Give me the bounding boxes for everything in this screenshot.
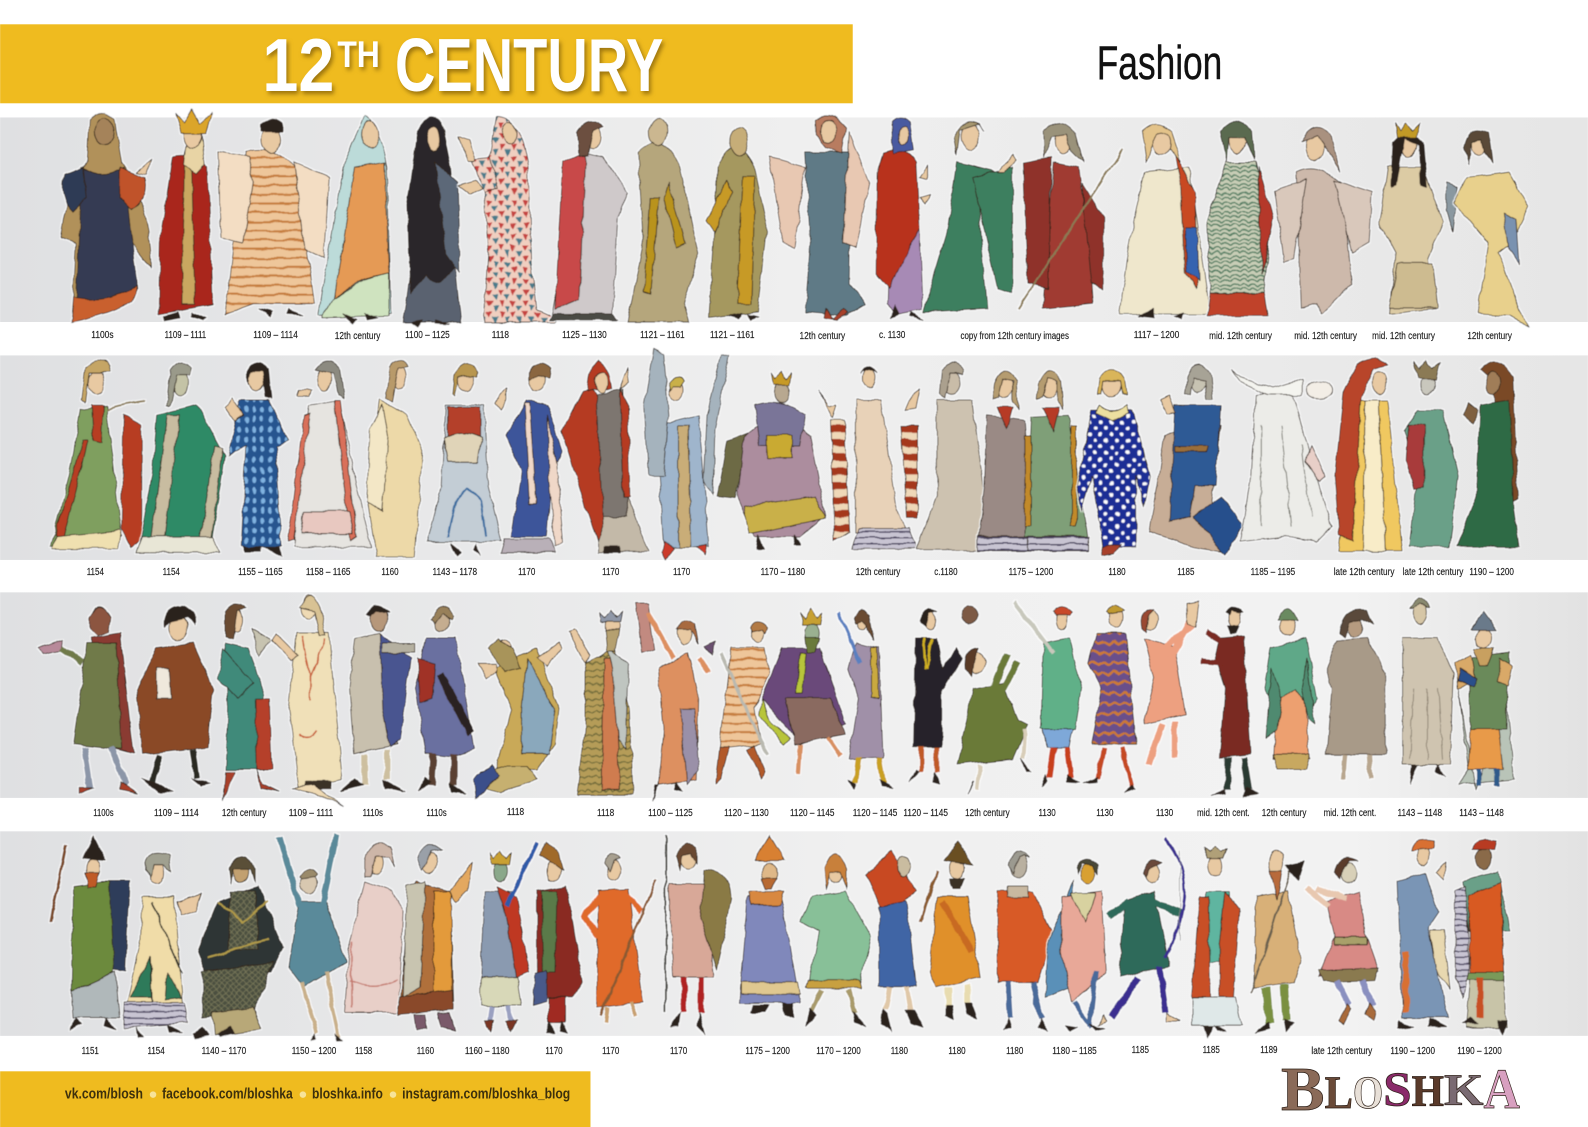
date labels: row 3: mid. 12th cent. bbox=[1197, 808, 1250, 819]
date labels: row 3: 1110s bbox=[426, 808, 447, 819]
date labels: row 3: 1130 bbox=[1096, 808, 1114, 819]
figure: man with sword and shield bbox=[51, 836, 130, 1030]
figure: woman in teal bbox=[218, 603, 280, 800]
date labels: row 3: 12th century bbox=[222, 808, 267, 819]
date labels: row 1: c. 1130 bbox=[879, 330, 906, 341]
figure: green-robed with grey hair bbox=[136, 362, 225, 553]
title banner bbox=[0, 23, 853, 107]
date labels: row 4: 1170 bbox=[670, 1046, 687, 1057]
figure: taupe woman bbox=[1274, 127, 1372, 314]
band: row 1 bbox=[0, 117, 1588, 322]
figure: woman in striped orange bbox=[218, 119, 329, 317]
date labels: row 1: 1109 – 1114 bbox=[253, 330, 298, 341]
date labels: row 3: 1143 – 1148 bbox=[1459, 808, 1504, 819]
figure: woman with blue-green cloak bbox=[1045, 859, 1106, 1031]
figure: kneeling king bbox=[474, 640, 561, 799]
figure: cream woman with green skirt bbox=[123, 852, 202, 1038]
date labels: row 2 bbox=[87, 567, 1514, 578]
figure: taupe man bbox=[1327, 610, 1385, 780]
date labels: row 2: 1170 bbox=[518, 567, 536, 578]
date labels: row 4: 1158 bbox=[355, 1046, 373, 1057]
date labels: row 3: 1130 bbox=[1039, 808, 1056, 819]
figure: man in striped tunic bbox=[1084, 605, 1136, 793]
figure: tan woman with hanging sleeves bbox=[818, 366, 920, 549]
figure: man in blue-lilac with orange hat bbox=[739, 835, 800, 1019]
date labels: row 2: 1185 bbox=[1177, 567, 1195, 578]
footer banner with links: facebook.com/bloshka bbox=[162, 1087, 293, 1103]
date labels: row 4: 1160 bbox=[417, 1046, 434, 1057]
date labels: row 1: copy from 12th century images bbox=[961, 331, 1069, 342]
date labels: row 4: 1180 bbox=[1006, 1046, 1024, 1057]
date labels: row 3: mid. 12th cent. bbox=[1324, 808, 1376, 819]
figure: two women in mauve and green bbox=[977, 371, 1089, 551]
figure: man in dark red bbox=[1201, 607, 1258, 796]
figure: khaki woman bbox=[628, 118, 699, 322]
title text: TH bbox=[337, 33, 380, 75]
figure: pale-blue figure with red book bbox=[427, 364, 506, 556]
date labels: row 2: 1170 – 1180 bbox=[761, 567, 805, 578]
date labels: row 1: 1109 – 1111 bbox=[165, 330, 206, 341]
logo: BLOSHKA: B bbox=[1281, 1054, 1325, 1124]
date labels: row 4: 1170 bbox=[602, 1046, 620, 1057]
figure: woman in gold bbox=[706, 128, 767, 320]
figure: dancer in blue-teal bbox=[280, 835, 346, 1041]
figure: red-haired woman in yellow bbox=[1335, 358, 1403, 552]
figure: crowned king with blue sword bbox=[481, 842, 537, 1033]
date labels: row 1: 12th century bbox=[800, 331, 846, 342]
date labels: row 3: 12th century bbox=[965, 808, 1010, 819]
figure: woman in black bbox=[403, 116, 461, 327]
figure: peach figure with sword bbox=[715, 622, 770, 784]
figure: white figure bending bbox=[1231, 370, 1333, 542]
figure: man in orange with red cap bbox=[1455, 840, 1509, 1035]
date labels: row 1 bbox=[91, 330, 1513, 342]
date labels: row 4: 1185 bbox=[1203, 1045, 1220, 1056]
date labels: row 3: 1118 bbox=[507, 807, 524, 818]
figure: blue-grey figure with long sleeve bbox=[770, 116, 869, 320]
date labels: row 3: 1109 – 1111 bbox=[289, 808, 334, 819]
figure: grey-cream man bbox=[1403, 598, 1453, 785]
figure row 2 bbox=[51, 349, 1519, 560]
figure: yellow woman bbox=[1454, 130, 1529, 326]
date labels: row 1: mid. 12th century bbox=[1209, 331, 1273, 342]
logo: BLOSHKA: H bbox=[1412, 1066, 1444, 1116]
date labels: row 1: 12th century bbox=[1467, 331, 1513, 342]
date labels: row 1: 1121 – 1161 bbox=[710, 330, 755, 341]
date labels: row 1: 1118 bbox=[492, 330, 509, 341]
figure: lilac woman with sword bbox=[839, 609, 893, 790]
date labels: row 3: 1120 – 1130 bbox=[724, 808, 769, 819]
figure: orange dancing woman bbox=[636, 602, 715, 800]
footer banner with links: instagram.com/bloshka_blog bbox=[402, 1087, 570, 1103]
date labels: row 3: 1100 – 1125 bbox=[648, 808, 693, 819]
figure: man in green with sword bbox=[1015, 602, 1082, 787]
date labels: row 2: 1158 – 1165 bbox=[306, 567, 351, 578]
figure: red mantle bishop bbox=[562, 359, 648, 553]
figure: seated man in dark mail bbox=[193, 857, 284, 1038]
date labels: row 2: 1143 – 1178 bbox=[433, 567, 477, 578]
date labels: row 2: 1155 – 1165 bbox=[238, 567, 283, 578]
date labels: row 2: late 12th century bbox=[1403, 567, 1464, 578]
figure: crowned queen bbox=[1379, 123, 1458, 314]
date labels: row 1: 1100 – 1125 bbox=[405, 330, 450, 341]
figure: man in orange tunic bbox=[930, 840, 980, 1021]
date labels: row 4: 1151 bbox=[82, 1046, 99, 1057]
figure row 4 bbox=[51, 835, 1509, 1041]
figure: salmon leaping man bbox=[1142, 601, 1199, 764]
figure: queen in teal and red-orange bbox=[1192, 847, 1242, 1038]
date labels: row 4 bbox=[82, 1045, 1502, 1057]
figure: bearded king in gold pattern bbox=[568, 610, 633, 795]
figure: man in orange-red with blue hose bbox=[998, 851, 1053, 1032]
figure: bearded man with axe bbox=[1251, 851, 1304, 1033]
figure: red cloak and purple bbox=[876, 117, 930, 320]
figure: woman with raised sleeves bbox=[644, 349, 729, 560]
logo: BLOSHKA: K bbox=[1444, 1065, 1484, 1115]
footer banner with links: vk.com/blosh bbox=[65, 1087, 143, 1103]
figure row 1 bbox=[61, 109, 1529, 327]
subtitle: Fashion: Fashion bbox=[1097, 37, 1222, 90]
date labels: row 2: 1170 bbox=[673, 567, 691, 578]
logo: BLOSHKA: L bbox=[1325, 1068, 1353, 1119]
title text bbox=[262, 23, 663, 107]
figure: man with red hood bbox=[865, 851, 937, 1032]
date labels: row 3: 1120 – 1145 bbox=[903, 808, 948, 819]
figure: man in orange with staff bbox=[584, 854, 656, 1022]
figure: woman in blue with white dots bbox=[1077, 370, 1150, 556]
figure: man in olive with maroon cloak bbox=[39, 607, 138, 794]
date labels: row 4: 1180 bbox=[891, 1046, 908, 1057]
footer banner with links: bloshka.info bbox=[312, 1087, 383, 1103]
date labels: row 2: c.1180 bbox=[934, 567, 958, 578]
figure: kneeling man in olive bbox=[957, 648, 1031, 794]
date labels: row 4: 1180 bbox=[948, 1046, 966, 1057]
date labels: row 2: 1154 bbox=[87, 567, 104, 578]
figure row 3 bbox=[39, 595, 1514, 806]
logo: BLOSHKA: S bbox=[1383, 1063, 1412, 1117]
figure: man in brown and orange bbox=[397, 845, 472, 1031]
date labels: row 3: 1130 bbox=[1156, 808, 1174, 819]
figure: enthroned purple king bbox=[760, 609, 846, 775]
figure: man in pink chopping bbox=[1306, 858, 1379, 1025]
figure: red woman with staff bbox=[1018, 123, 1122, 309]
figure: man in black with head in hand bbox=[909, 607, 978, 784]
date labels: row 2: 1190 – 1200 bbox=[1469, 567, 1514, 578]
date labels: row 4: 1185 bbox=[1132, 1045, 1149, 1056]
date labels: row 1: 1121 – 1161 bbox=[640, 330, 685, 341]
figure: woman in blue drop pattern bbox=[225, 363, 289, 557]
figure: soldier with spear and shield bbox=[665, 835, 731, 1035]
date labels: row 3: 12th century bbox=[1262, 808, 1307, 819]
date labels: row 3: 1118 bbox=[597, 808, 615, 819]
date labels: row 3: 1100s bbox=[93, 808, 114, 819]
date labels: row 3: 1120 – 1145 bbox=[853, 808, 898, 819]
date labels: row 4: 1150 – 1200 bbox=[292, 1046, 337, 1057]
figure: pale figure in cream bbox=[272, 595, 342, 806]
figure: hooded woman in navy bbox=[61, 113, 151, 322]
footer banner with links bbox=[0, 1071, 590, 1127]
date labels: row 4: 1180 – 1185 bbox=[1052, 1046, 1097, 1057]
title text: CENTURY bbox=[395, 23, 663, 107]
figure: blue figure with stole bbox=[500, 363, 563, 553]
figure: woman in dark green with brown hair bbox=[1456, 361, 1519, 547]
figure: man in dark red and green bbox=[533, 841, 582, 1033]
date labels: row 2: 1160 bbox=[381, 567, 399, 578]
figure: man in tan with blue mantle bbox=[340, 606, 415, 792]
figure: cream woman bbox=[367, 360, 422, 557]
figure: beige woman bbox=[917, 364, 987, 550]
title text: 12 bbox=[262, 23, 334, 107]
figure: cream woman with red cloak bbox=[1119, 125, 1210, 319]
date labels: row 4: 1170 bbox=[545, 1046, 563, 1057]
figure: woman in triangle pattern bbox=[458, 116, 557, 322]
figure: woman in patterned grey-green bbox=[1207, 122, 1273, 316]
date labels: row 1: 1125 – 1130 bbox=[562, 330, 607, 341]
band: row 3 bbox=[0, 592, 1588, 798]
date labels: row 4: 1160 – 1180 bbox=[465, 1046, 510, 1057]
date labels: row 1: 1100s bbox=[91, 330, 114, 341]
figure: green woman bbox=[924, 121, 1017, 312]
date labels: row 3: 1109 – 1114 bbox=[154, 808, 199, 819]
date labels: row 3: 1143 – 1148 bbox=[1397, 808, 1442, 819]
figure: pale pink woman bbox=[344, 844, 403, 1013]
date labels: row 4: late 12th century bbox=[1311, 1046, 1373, 1057]
band: row 2 bbox=[0, 355, 1588, 560]
band: row 4 bbox=[0, 831, 1588, 1036]
date labels: row 2: 1180 bbox=[1108, 567, 1126, 578]
date labels: row 4: 1175 – 1200 bbox=[745, 1046, 790, 1057]
date labels: row 1: 1117 – 1200 bbox=[1134, 330, 1180, 341]
date labels: row 2: 12th century bbox=[856, 567, 901, 578]
logo: BLOSHKA bbox=[1281, 1054, 1520, 1124]
logo: BLOSHKA: O bbox=[1353, 1068, 1383, 1119]
date labels: row 1: 12th century bbox=[335, 331, 381, 342]
figure: crowned woman in teal bbox=[1404, 360, 1458, 547]
figure: man in brown cloak bbox=[137, 606, 213, 792]
figure: bishop in green and orange bbox=[1264, 608, 1316, 769]
figure: grey woman with red mantle bbox=[549, 121, 628, 320]
figure: white woman with pink border bbox=[288, 361, 371, 547]
figure: man in light green bbox=[800, 854, 871, 1027]
figure: seated king bbox=[717, 371, 825, 549]
date labels: row 4: 1170 – 1200 bbox=[816, 1046, 861, 1057]
figure: archer in dark green bbox=[1098, 838, 1185, 1026]
figure: man in blue-grey with orange cap bbox=[1397, 840, 1450, 1029]
date labels: row 3: 1120 – 1145 bbox=[790, 808, 835, 819]
date labels: row 4: 1189 bbox=[1260, 1045, 1278, 1056]
figure: green woman with red stripe bbox=[51, 359, 145, 549]
date labels: row 2: 1154 bbox=[163, 567, 180, 578]
date labels: row 4: 1154 bbox=[147, 1046, 165, 1057]
date labels: row 2: 1170 bbox=[602, 567, 620, 578]
figure: blue figure with tan lining bbox=[1149, 365, 1244, 555]
date labels: row 4: 1190 – 1200 bbox=[1457, 1046, 1502, 1057]
date labels: row 4: 1140 – 1170 bbox=[202, 1046, 247, 1057]
date labels: row 2: 1185 – 1195 bbox=[1251, 567, 1296, 578]
figure: woman in orange with blue mantle bbox=[318, 116, 391, 323]
date labels: row 1: mid. 12th century bbox=[1294, 331, 1358, 342]
date labels: row 3 bbox=[93, 807, 1504, 819]
logo: BLOSHKA: A bbox=[1484, 1058, 1520, 1121]
figure: queen in red bbox=[159, 109, 213, 321]
date labels: row 3: 1110s bbox=[363, 808, 383, 819]
date labels: row 2: late 12th century bbox=[1334, 567, 1395, 578]
date labels: row 2: 1175 – 1200 bbox=[1009, 567, 1054, 578]
date labels: row 4: 1190 – 1200 bbox=[1390, 1046, 1435, 1057]
figure: bearded king with blue sash bbox=[1455, 612, 1514, 790]
date labels: row 1: mid. 12th century bbox=[1372, 331, 1436, 342]
figure: man in blue-grey cloak bbox=[415, 606, 474, 794]
